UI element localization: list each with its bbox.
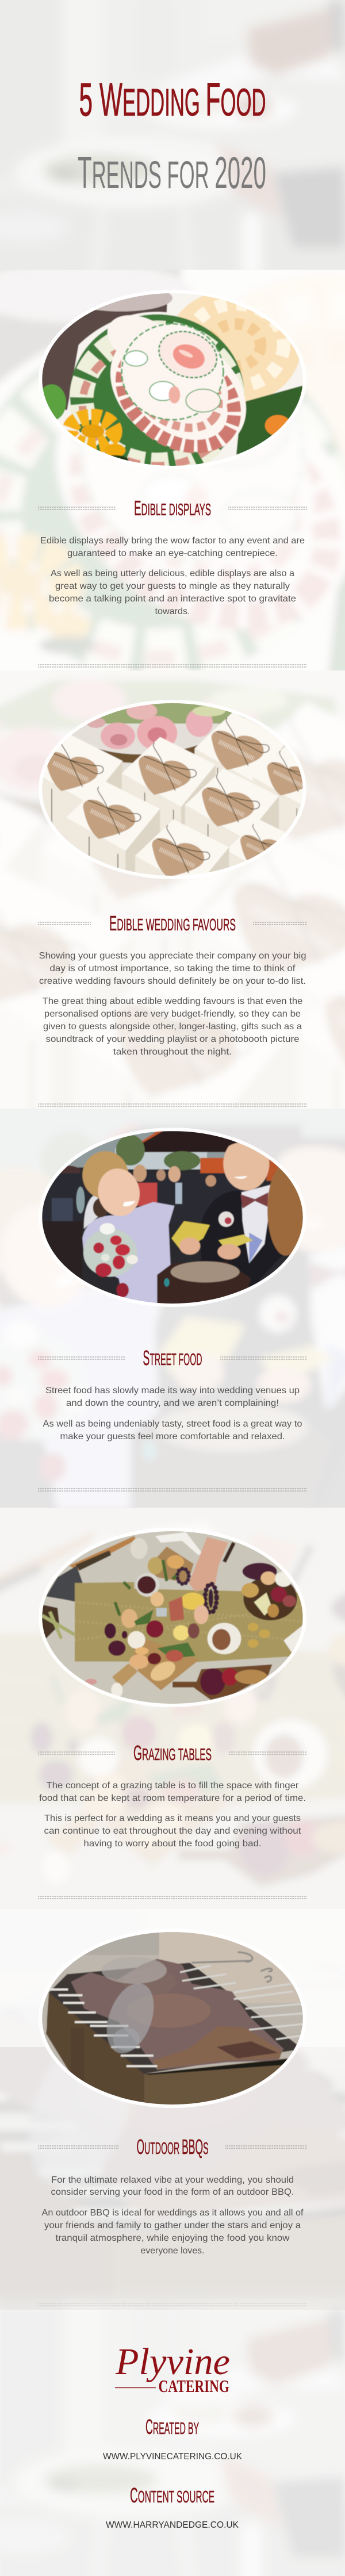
heading: grazing tables [38,1741,307,1765]
text: edible wedding favours: The great thing about edible wedding favours is that even the [43,996,303,1006]
panel: footer background [0,2298,345,2576]
text: grazing tables: food that can be kept at room temperature for a period of time. [39,1793,306,1803]
heading: edible wedding favours: EDIBLE WEDDING FAVOURS [109,911,236,935]
heading: edible displays: EDIBLE DISPLAYS [134,496,211,520]
text: street food [43,1386,302,1442]
text: street food: Street food has slowly made its way into wedding venues up [45,1386,300,1396]
text: edible displays: become a talking point and an interactive spot to gravitate [49,594,296,604]
heading: edible wedding favours [38,911,307,935]
heading: grazing tables: GRAZING TABLES [133,1741,212,1765]
text: outdoor bbqs: everyone loves. [140,2246,205,2256]
panel: wedding favours background [0,673,345,1109]
logo: plyvine catering: Plyvine [115,2341,230,2383]
panel: edible displays background [0,270,345,670]
text: outdoor bbqs: consider serving your food in the form of an outdoor BBQ. [51,2187,294,2197]
text: edible displays: As well as being utterly delicious, edible displays are also a [51,569,294,578]
heading: created by: CREATED BY [145,2415,199,2439]
photo: carved melon [39,290,306,466]
text: outdoor bbqs: An outdoor BBQ is ideal for weddings as it allows you and all of [41,2208,304,2218]
text: outdoor bbqs: tranquil atmosphere, while enjoying the food you know [55,2233,290,2243]
text: street food: As well as being undeniably tasty, street food is a great way to [43,1419,302,1429]
text: edible displays: Edible displays really bring the wow factor to any event and are [40,536,305,546]
text: edible displays: towards. [155,607,190,616]
text: edible wedding favours [39,951,306,1057]
text: edible wedding favours: taken throughout the night. [113,1047,232,1057]
link: harry and edge url: WWW.HARRYANDEDGE.CO.UK [106,2520,239,2530]
text: grazing tables: having to worry about the food going bad. [84,1839,261,1849]
text: grazing tables: can continue to eat throughout the day and evening without [44,1826,301,1836]
title: 5 WEDDING FOOD [79,74,266,126]
heading: content source: CONTENT SOURCE [130,2483,214,2507]
heading: outdoor bbqs: OUTDOOR BBQS [137,2135,208,2159]
heading: outdoor bbqs [38,2135,307,2159]
text: grazing tables [39,1781,306,1849]
text: edible wedding favours: given to guests alongside other, longer-lasting, gifts such as a [43,1022,302,1032]
text: edible displays [40,536,305,616]
text: street food: make your guests feel more comfortable and relaxed. [60,1432,285,1442]
photo: bride and groom [39,1128,306,1307]
heading: edible displays [38,496,307,520]
text: outdoor bbqs [41,2175,304,2256]
text: edible wedding favours: day is of utmost importance, so taking the time to think of [49,964,296,973]
heading: street food [38,1346,307,1370]
panel: outdoor bbqs background [0,2007,345,2310]
title: TRENDS FOR 2020 [78,147,266,198]
title [78,74,266,198]
text: edible displays: guaranteed to make an eye-catching centrepiece. [67,549,278,558]
text: edible wedding favours: Showing your guests you appreciate their company on your big [39,951,306,961]
text: outdoor bbqs: your friends and family to gather under the stars and enjoy a [44,2221,301,2230]
panel: street food background [0,1109,345,1508]
link: plyvine catering url: WWW.PLYVINECATERING.CO.UK [103,2452,243,2462]
text: edible wedding favours: soundtrack of your wedding playlist or a photobooth picture [46,1034,300,1044]
panel: grazing tables background [0,1508,345,1909]
text: outdoor bbqs: For the ultimate relaxed vibe at your wedding, you should [51,2175,294,2185]
text: grazing tables: The concept of a grazing table is to fill the space with finger [46,1781,299,1791]
logo: plyvine catering: CATERING [159,2376,229,2396]
text: grazing tables: This is perfect for a wedding as it means you and your guests [44,1814,301,1823]
photo: barbecue skewers [39,1932,303,2108]
text: edible wedding favours: personalised options are very budget-friendly, so they can be [44,1009,301,1019]
text: edible wedding favours: creative wedding favours should definitely be on your to-do list. [39,976,306,986]
photo: wedding favour boxes [39,700,306,879]
photo: grazing table [39,1529,306,1707]
heading: street food: STREET FOOD [143,1346,202,1370]
panel: header background [0,0,345,288]
text: edible displays: great way to get your guests to mingle as they naturally [55,581,290,591]
text: street food: and down the country, and we aren’t complaining! [66,1398,279,1408]
